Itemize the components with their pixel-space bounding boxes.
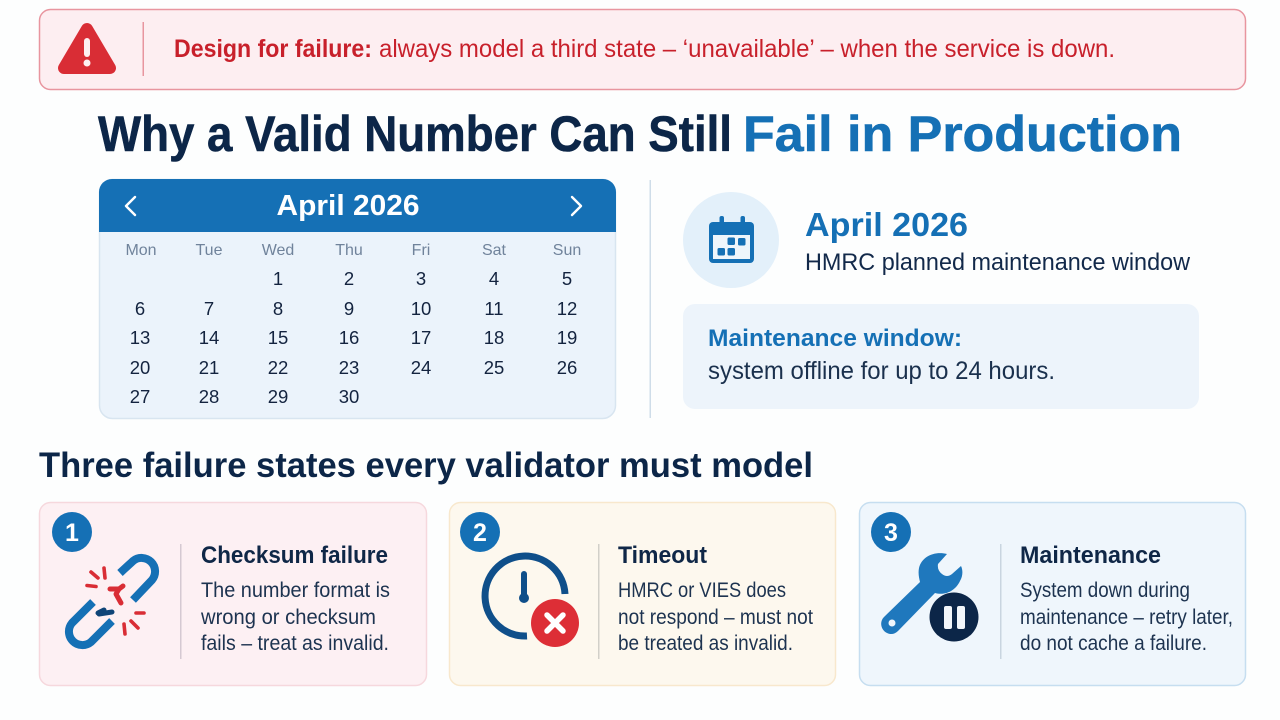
card body: be treated as invalid. — [618, 632, 793, 655]
card body — [1020, 579, 1233, 655]
card body: fails – treat as invalid. — [201, 632, 389, 655]
weekday labels: Sat — [482, 242, 507, 259]
badge 2: 2 — [473, 519, 487, 547]
alert banner — [40, 10, 1246, 90]
card body: The number format is — [201, 579, 390, 602]
calendar dates: 5 — [562, 268, 572, 289]
section heading: Three failure states every validator must model — [39, 446, 813, 485]
weekday labels: Sun — [553, 242, 581, 259]
callout: maintenance window: system offline for up to 24 hours. — [708, 357, 1055, 385]
calendar dates: 3 — [416, 268, 426, 289]
calendar dates: 20 — [130, 357, 150, 378]
calendar dates: 15 — [268, 327, 288, 348]
calendar dates: 4 — [489, 268, 499, 289]
calendar dates: 30 — [339, 386, 359, 407]
icon: next arrow — [572, 197, 581, 215]
banner message: always model a third state – ‘unavailable’ – when the service is down. — [379, 35, 1115, 63]
calendar dates: 12 — [557, 298, 577, 319]
badge 3 — [871, 512, 911, 552]
calendar dates: 9 — [344, 298, 354, 319]
calendar dates: 22 — [268, 357, 288, 378]
badge 3: 3 — [884, 519, 898, 547]
callout: maintenance window — [683, 304, 1199, 409]
calendar dates: 2 — [344, 268, 354, 289]
weekday labels: Mon — [125, 242, 157, 259]
panel: timeout — [450, 502, 836, 686]
callout: maintenance window: Maintenance window: — [708, 325, 962, 352]
badge 2 — [460, 512, 500, 552]
maintenance heading: April 2026 — [805, 206, 968, 243]
card title: Timeout — [618, 542, 707, 569]
calendar dates: 26 — [557, 357, 577, 378]
calendar dates: 7 — [204, 298, 214, 319]
calendar dates: 17 — [411, 327, 431, 348]
calendar dates: 8 — [273, 298, 283, 319]
card body: maintenance – retry later, — [1020, 606, 1233, 629]
badge 1 — [52, 512, 92, 552]
icon: previous arrow — [126, 197, 135, 215]
card body: System down during — [1020, 579, 1190, 602]
calendar dates: 23 — [339, 357, 359, 378]
calendar dates: 21 — [199, 357, 219, 378]
card body: not respond – must not — [618, 606, 813, 629]
weekday labels: Wed — [262, 242, 294, 259]
calendar month: April 2026 — [276, 190, 420, 222]
calendar dates: 29 — [268, 386, 288, 407]
card body: wrong or checksum — [200, 606, 376, 629]
calendar dates: 27 — [130, 386, 150, 407]
weekday labels — [125, 242, 581, 259]
icon: clock with error — [485, 556, 579, 647]
card body: do not cache a failure. — [1020, 632, 1207, 655]
icon: warning triangle — [64, 29, 110, 68]
badge 1: 1 — [65, 519, 79, 547]
panel: checksum failure — [40, 502, 426, 686]
calendar dates — [130, 268, 577, 407]
title: Why a Valid Number Can Still — [98, 106, 732, 162]
card title: Maintenance — [1020, 542, 1161, 569]
calendar dates: 14 — [199, 327, 219, 348]
card title: Checksum failure — [201, 542, 388, 569]
calendar dates: 10 — [411, 298, 431, 319]
card body: HMRC or VIES does — [618, 579, 786, 602]
calendar dates: 11 — [484, 298, 504, 319]
title — [98, 106, 1182, 162]
calendar dates: 24 — [411, 357, 431, 378]
panel: maintenance — [860, 502, 1246, 686]
icon: calendar in circle — [683, 192, 779, 288]
calendar dates: 18 — [484, 327, 504, 348]
icon: broken chain link — [69, 558, 155, 645]
weekday labels: Tue — [196, 242, 223, 259]
weekday labels: Fri — [412, 242, 430, 259]
maintenance subheading: HMRC planned maintenance window — [805, 249, 1191, 276]
calendar dates: 16 — [339, 327, 359, 348]
calendar dates: 1 — [273, 268, 283, 289]
calendar dates: 13 — [130, 327, 150, 348]
calendar dates: 25 — [484, 357, 504, 378]
card body — [200, 579, 390, 655]
card body — [618, 579, 813, 655]
calendar header bar — [99, 179, 616, 232]
panel: maintenance info — [683, 192, 1199, 409]
calendar dates: 28 — [199, 386, 219, 407]
calendar dates: 19 — [557, 327, 577, 348]
panel: calendar — [99, 179, 616, 418]
weekday labels: Thu — [335, 242, 363, 259]
title: Fail in Production — [743, 106, 1182, 162]
banner message: Design for failure: — [174, 35, 372, 63]
icon: wrench with pause — [881, 553, 978, 642]
calendar dates: 6 — [135, 298, 145, 319]
